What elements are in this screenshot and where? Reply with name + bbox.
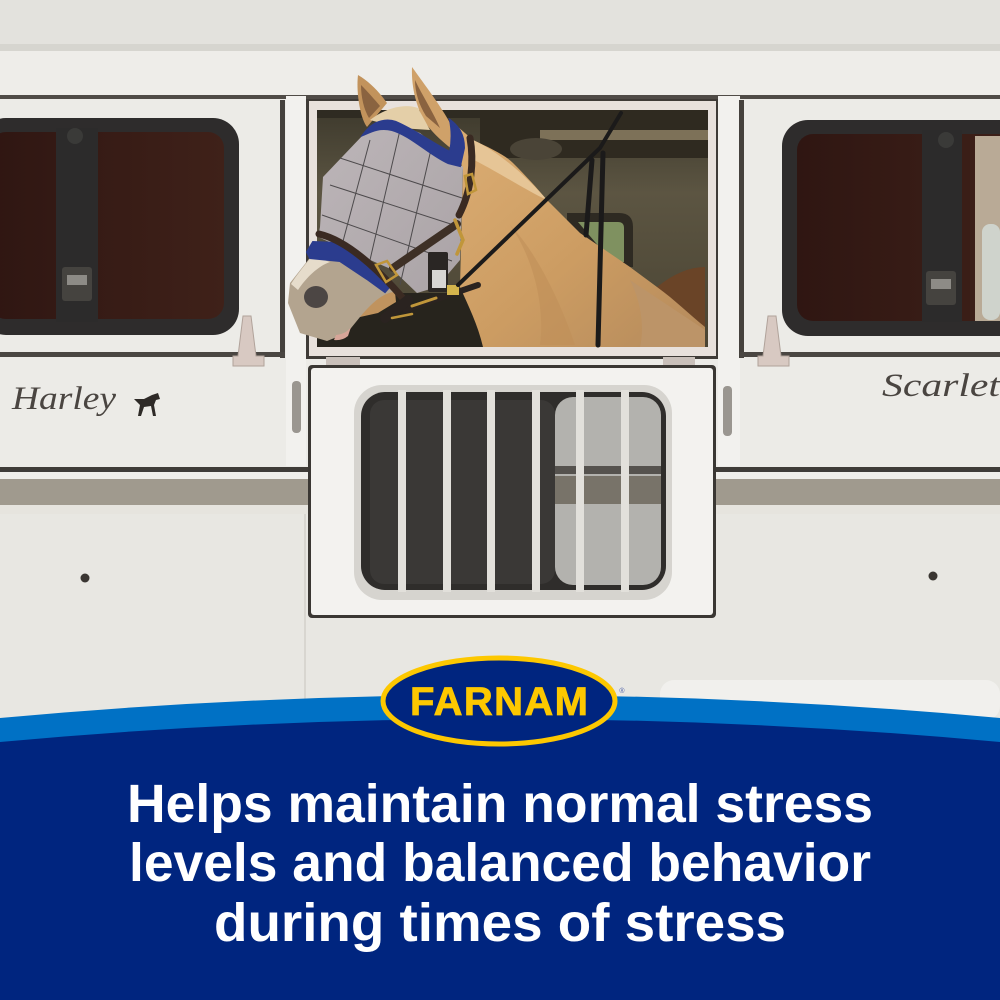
banner: light blue arc [0,695,1000,1000]
blue fleece trim nose [307,242,391,292]
registered mark: ® [619,687,625,695]
name decal Harley: Harley [11,381,116,417]
headline [127,774,873,953]
icon: horse decal [134,393,160,416]
banner: navy panel [0,719,1000,1000]
photo: horse trailer [0,0,1000,770]
left window [0,118,239,335]
neck and body [450,120,705,347]
logo wordmark: FARNAM [410,680,588,724]
latches [233,316,264,366]
lower hatch door [308,365,716,618]
stripes [0,467,1000,472]
horse [288,67,705,347]
lead rope [458,113,621,345]
headline: Helps maintain normal stress [127,774,873,834]
headline: levels and balanced behavior [129,833,871,893]
muzzle [288,255,395,341]
logo: Farnam oval [383,658,625,744]
forelock [370,106,430,130]
interior small window [567,213,633,267]
upper opening [306,99,718,359]
blue fleece trim top [363,120,464,166]
name decal Scarlet: Scarlet [882,368,1000,404]
fly mask [318,122,463,293]
headline: during times of stress [214,893,786,953]
halter [319,138,478,318]
ears [357,75,387,127]
right window [782,120,1000,336]
